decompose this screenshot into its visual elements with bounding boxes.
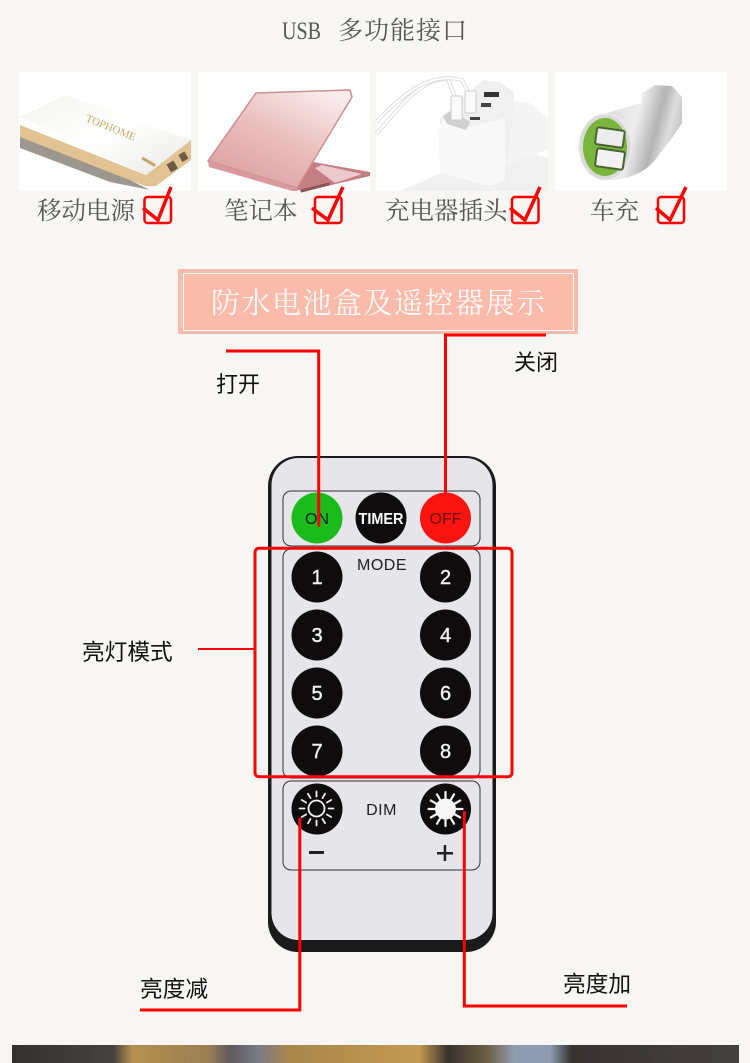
callout: brightness up: 亮度加 bbox=[563, 971, 631, 997]
button group: mode: 8 bbox=[440, 741, 451, 763]
icon: checkboxes bbox=[143, 187, 686, 223]
banner heading bbox=[178, 269, 578, 334]
photo: car charger bbox=[555, 72, 727, 191]
callout: brightness down: 亮度减 bbox=[140, 976, 208, 1002]
button group: mode: 6 bbox=[440, 683, 451, 705]
button group: on timer off: TIMER bbox=[358, 511, 404, 528]
callout: lighting modes: 亮灯模式 bbox=[82, 639, 173, 665]
photo labels: 车充 bbox=[590, 197, 639, 225]
button group: mode: 2 bbox=[440, 567, 451, 589]
photo: bottom strip bbox=[12, 1045, 739, 1063]
title bbox=[282, 17, 468, 45]
button group: mode: 4 bbox=[440, 625, 451, 647]
photo labels: 移动电源 bbox=[37, 197, 135, 225]
remote body bbox=[268, 456, 496, 952]
title: USB bbox=[282, 18, 321, 45]
button group: on timer off: OFF bbox=[430, 511, 462, 528]
photo: charger plug bbox=[376, 72, 548, 191]
callout: brightness up bbox=[464, 811, 631, 1006]
photo labels bbox=[37, 197, 639, 225]
button group: mode bbox=[283, 549, 480, 778]
callout: on bbox=[216, 351, 319, 527]
callout: off bbox=[446, 335, 558, 493]
button group: mode: 3 bbox=[311, 625, 323, 647]
button group: on timer off bbox=[283, 491, 480, 546]
button group: mode: MODE bbox=[357, 557, 407, 574]
callout: on: 打开 bbox=[216, 372, 260, 397]
callout: lighting modes bbox=[82, 548, 512, 777]
button group: on timer off: ON bbox=[305, 511, 329, 528]
callout: brightness down bbox=[140, 818, 300, 1010]
button group: mode: 7 bbox=[311, 741, 323, 763]
photo: power bank bbox=[19, 72, 191, 191]
button group: mode: 1 bbox=[311, 567, 323, 589]
photo labels: 充电器插头 bbox=[385, 197, 508, 225]
button group: mode: 5 bbox=[311, 683, 323, 705]
banner heading: 防水电池盒及遥控器展示 bbox=[211, 287, 547, 320]
photo: power bank: TOPHOME bbox=[84, 113, 138, 144]
remote control bbox=[268, 456, 496, 952]
title: 多功能接口 bbox=[338, 17, 468, 45]
button group: dim bbox=[283, 781, 480, 870]
callout: off: 关闭 bbox=[514, 350, 558, 375]
photo: laptop bbox=[198, 72, 370, 193]
button group: dim: DIM bbox=[366, 802, 397, 819]
photo labels: 笔记本 bbox=[224, 197, 298, 225]
